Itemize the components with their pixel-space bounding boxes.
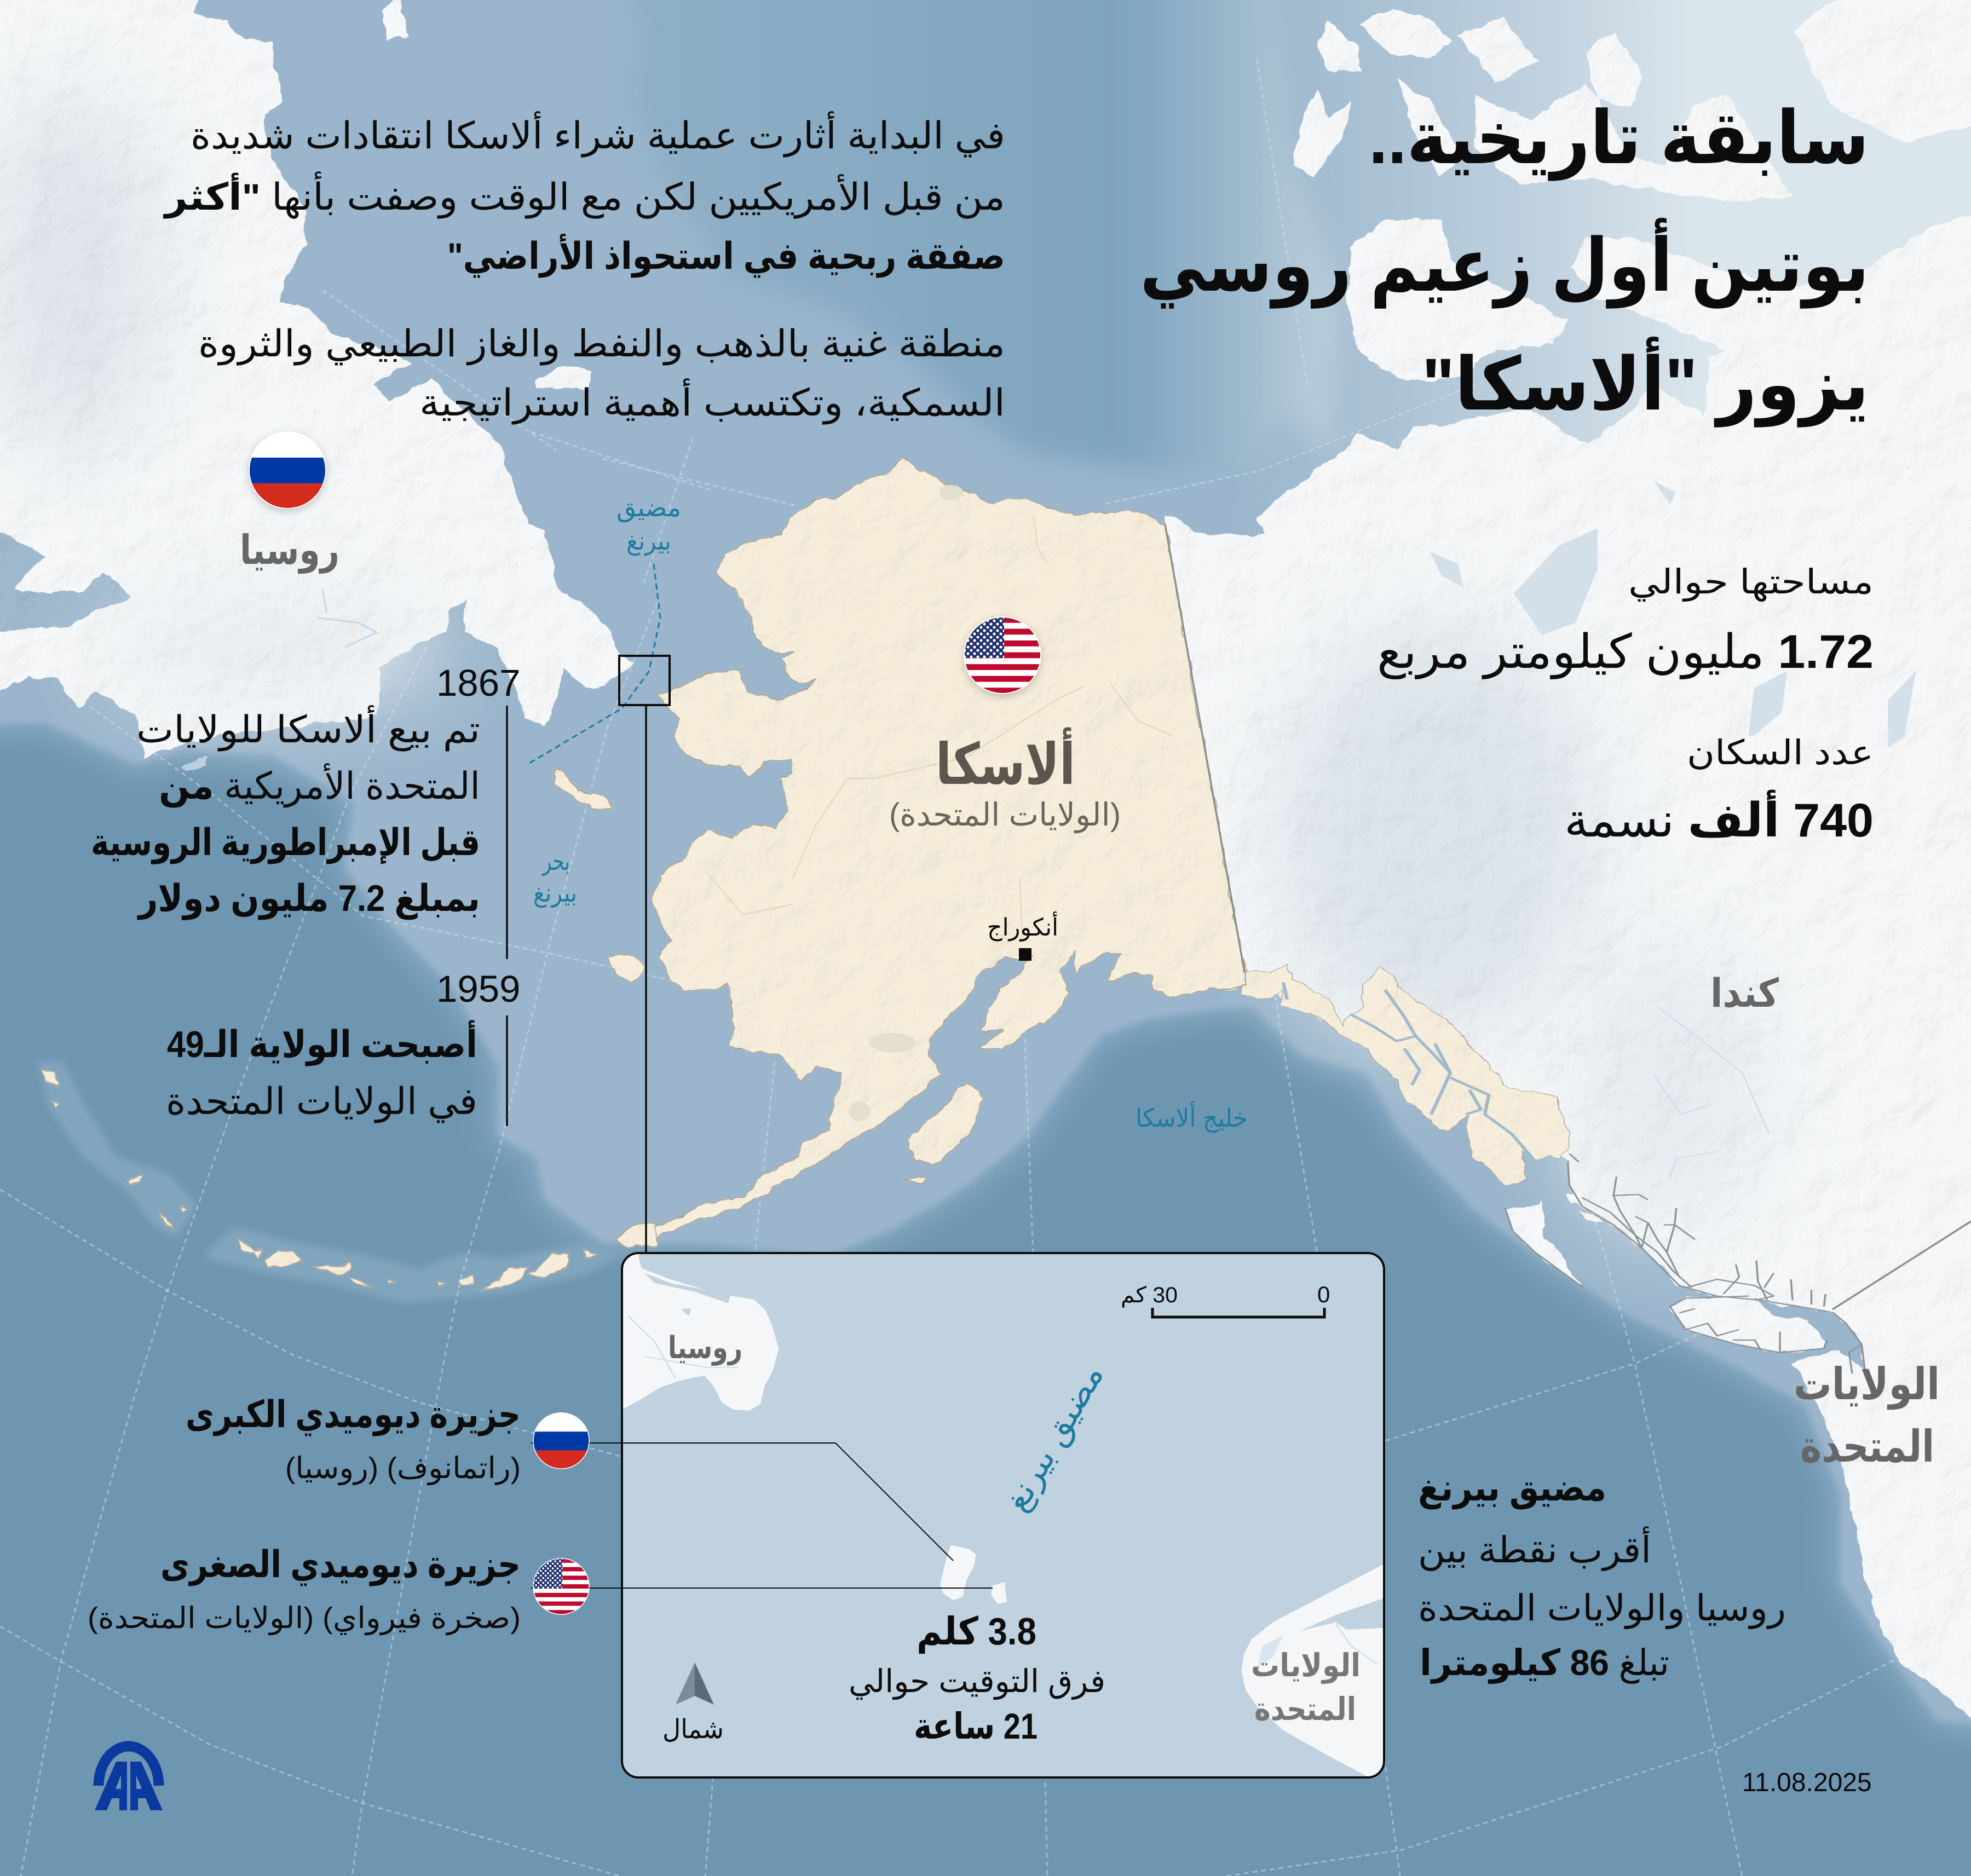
label: Alaska: (الولايات المتحدة) <box>889 797 1121 834</box>
label: Gulf of Alaska: خليج ألاسكا <box>1136 1101 1248 1133</box>
inset callout: distance and time difference: 21 ساعة <box>914 1706 1038 1746</box>
label: Bering Sea <box>533 847 577 908</box>
intro text <box>163 111 1005 425</box>
inset labels: روسيا <box>668 1330 742 1366</box>
intro text: في البداية أثارت عملية شراء ألاسكا انتقادات شديدة <box>191 111 1005 158</box>
stats: area and population <box>1377 563 1874 847</box>
leader line: Big Diomede <box>531 1443 953 1561</box>
callout: Little Diomede: جزيرة ديوميدي الصغرى <box>160 1544 521 1586</box>
callout: Big Diomede: (راتمانوف) (روسيا) <box>285 1452 521 1485</box>
timeline: 1959 <box>166 968 520 1126</box>
stats: area and population: عدد السكان <box>1687 734 1874 772</box>
Alaska rivers <box>707 517 1174 941</box>
callout: Bering Strait facts: تبلغ 86 كيلومترا <box>1420 1642 1669 1684</box>
flag: Russia small <box>533 1412 590 1469</box>
inset callout: distance and time difference: فرق التوقيت حوالي <box>849 1664 1105 1700</box>
flag: USA small <box>533 1558 590 1615</box>
callout: Bering Strait facts: مضيق بيرنغ <box>1418 1467 1606 1510</box>
timeline: 1867 <box>91 662 520 959</box>
label: Bering Strait <box>616 493 681 556</box>
callout: Bering Strait facts: روسيا والولايات المتحدة <box>1418 1588 1786 1629</box>
label: Russia: روسيا <box>240 527 339 574</box>
timeline: 1959: أصبحت الولاية الـ49 <box>167 1020 477 1066</box>
stats: area and population: 1.72 مليون كيلومتر مربع <box>1377 626 1874 679</box>
timeline: 1959: 1959 <box>436 968 520 1010</box>
label: Bering Strait: بيرنغ <box>626 527 671 556</box>
title <box>1140 97 1869 428</box>
intro text: منطقة غنية بالذهب والنفط والغاز الطبيعي والثروة <box>198 323 1005 366</box>
label: Alaska: ألاسكا <box>936 727 1075 796</box>
stats: area and population: مساحتها حوالي <box>1628 563 1874 602</box>
Bering Strait dashed line <box>527 564 660 765</box>
callout: Little Diomede <box>88 1544 590 1635</box>
date: 11.08.2025 <box>1742 1768 1872 1797</box>
scale bar: 0 <box>1317 1282 1330 1307</box>
label: Bering Strait: مضيق <box>616 493 681 523</box>
intro text: السمكية، وتكتسب أهمية استراتيجية <box>419 378 1005 425</box>
callout: Big Diomede: جزيرة ديوميدي الكبرى <box>186 1394 521 1436</box>
inset map panel <box>622 1246 1388 1777</box>
US-Canada border <box>1832 1221 1971 1309</box>
label: Alaska <box>889 727 1121 834</box>
inset labels <box>668 1330 1361 1727</box>
lake patches in Alaska <box>849 485 963 1121</box>
lakes and rivers <box>318 481 1916 1178</box>
stats: area and population: 740 ألف نسمة <box>1564 789 1874 847</box>
callout: Big Diomede <box>186 1394 590 1485</box>
inset labels: الولايات <box>1251 1648 1361 1684</box>
intro text: صفقة ربحية في استحواذ الأراضي" <box>447 233 1005 278</box>
land: Alaska <box>42 456 1569 1290</box>
callout: Little Diomede: (صخرة فيرواي) (الولايات المتحدة) <box>88 1602 521 1635</box>
label: Canada: كندا <box>1710 972 1779 1015</box>
scale bar: 30 كم <box>1121 1283 1178 1308</box>
label: Bering Sea: بحر <box>542 847 570 876</box>
label: United States: المتحدة <box>1800 1422 1934 1471</box>
flag: USA <box>964 616 1041 697</box>
title: يزور "ألاسكا" <box>1422 337 1869 428</box>
north arrow <box>662 1663 724 1744</box>
city: Anchorage: أنكوراج <box>987 911 1058 942</box>
leader line: Little Diomede <box>531 1588 993 1589</box>
flag: Russia <box>249 431 326 512</box>
city: Anchorage <box>987 911 1058 961</box>
title: بوتين أول زعيم روسي <box>1140 218 1869 309</box>
Alaska-Canada border <box>1165 524 1244 972</box>
callout: Bering Strait facts: أقرب نقطة بين <box>1418 1526 1651 1571</box>
panhandle channels <box>1283 983 1535 1161</box>
timeline: 1959: في الولايات المتحدة <box>166 1081 477 1123</box>
inset callout: distance and time difference <box>849 1610 1105 1746</box>
timeline: 1867: قبل الإمبراطورية الروسية <box>91 822 480 864</box>
label: Bering Sea: بيرنغ <box>533 879 577 908</box>
locator connector line <box>645 705 647 1253</box>
callout: Bering Strait facts <box>1418 1467 1786 1684</box>
label: United States <box>1794 1360 1940 1471</box>
timeline: 1867: تم بيع ألاسكا للولايات <box>136 705 480 752</box>
timeline: 1867: بمبلغ 7.2 مليون دولار <box>137 878 480 920</box>
scale bar <box>1121 1282 1330 1317</box>
inset land <box>622 1246 1388 1776</box>
label: United States: الولايات <box>1794 1360 1940 1410</box>
inset callout: distance and time difference: 3.8 كلم <box>917 1610 1036 1654</box>
inset labels: المتحدة <box>1254 1692 1356 1727</box>
inset labels: مضيق بيرنغ <box>998 1358 1111 1518</box>
coast fjords: British Columbia <box>1505 1153 1865 1373</box>
north arrow: شمال <box>662 1715 724 1744</box>
timeline: 1867: 1867 <box>436 662 520 704</box>
timeline: 1867: المتحدة الأمريكية من <box>159 763 480 808</box>
logo: AA <box>95 1746 163 1810</box>
locator box <box>619 656 670 705</box>
title: سابقة تاريخية.. <box>1369 97 1869 181</box>
intro text: من قبل الأمريكيين لكن مع الوقت وصفت بأنها "أكثر <box>163 171 1005 219</box>
